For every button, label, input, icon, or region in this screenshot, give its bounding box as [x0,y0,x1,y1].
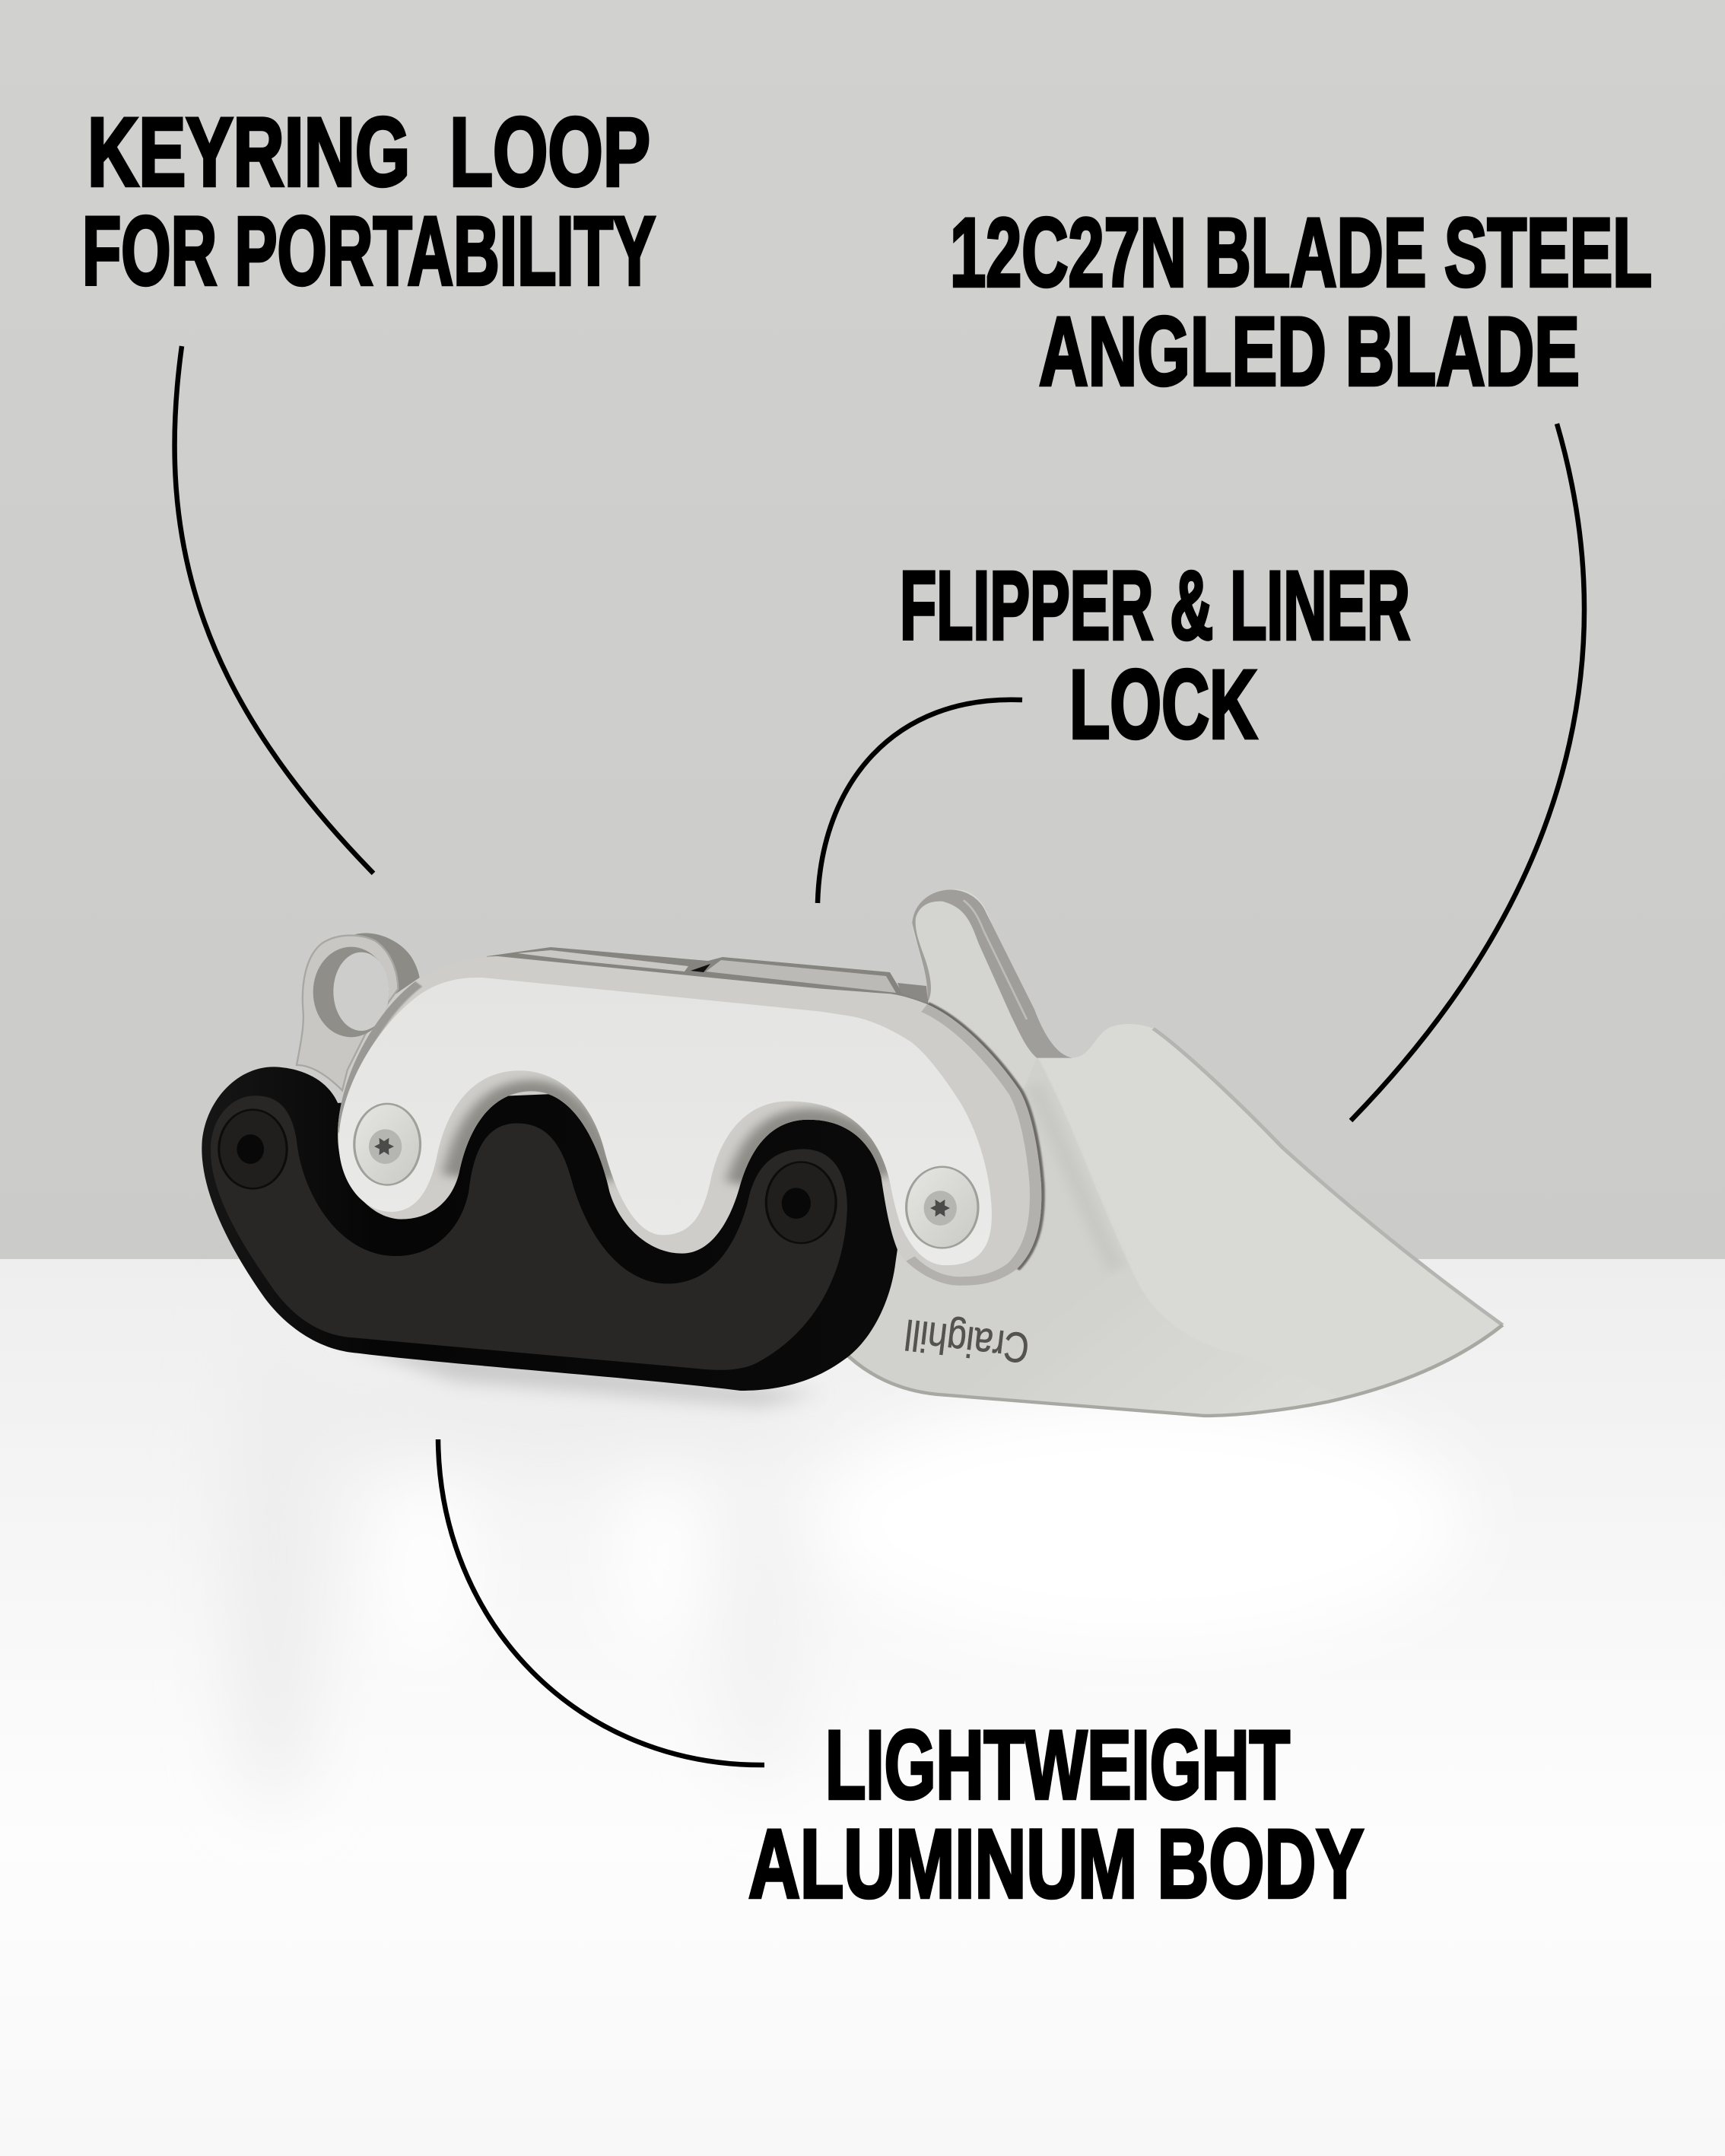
keyring loop [297,933,420,1090]
silver scale face [338,978,992,1265]
black scale face [211,1095,847,1370]
spine and liner clip [487,947,928,1016]
blade logo: Craighill [902,1311,1031,1372]
black handle scale [202,1067,901,1391]
background wall [0,0,1725,1263]
heading: keyring loop: KEYRING LOOP [87,98,650,207]
callout curve: keyring loop [175,346,373,873]
silver screw right [907,1167,978,1248]
background table [0,1259,1725,2156]
torx recess right [930,1200,950,1216]
heading: flipper and lock: LOCK [1069,650,1257,759]
knife product [202,889,1503,1416]
heading: keyring loop [82,98,656,306]
knife contact shadow [335,1339,821,1406]
heading: aluminum body: ALUMINUM BODY [748,1810,1364,1919]
heading: aluminum body: LIGHTWEIGHT [825,1711,1290,1820]
callout curve: aluminum body [438,1439,764,1765]
silver handle scale [328,952,1056,1291]
callout curve: blade [1351,424,1584,1121]
blade [821,889,1503,1416]
black screw left [219,1110,287,1188]
callout curve: flipper and lock [818,700,1022,903]
torx recess left [374,1138,394,1155]
heading: aluminum body [748,1711,1364,1919]
black screw right [766,1162,836,1243]
silver screw left [354,1104,421,1185]
heading: flipper and lock: FLIPPER & LINER [900,552,1410,660]
flipper tab [912,889,1072,1093]
heading: keyring loop: FOR PORTABILITY [82,197,656,306]
heading: flipper and lock [900,552,1410,759]
heading: blade steel [950,199,1652,406]
